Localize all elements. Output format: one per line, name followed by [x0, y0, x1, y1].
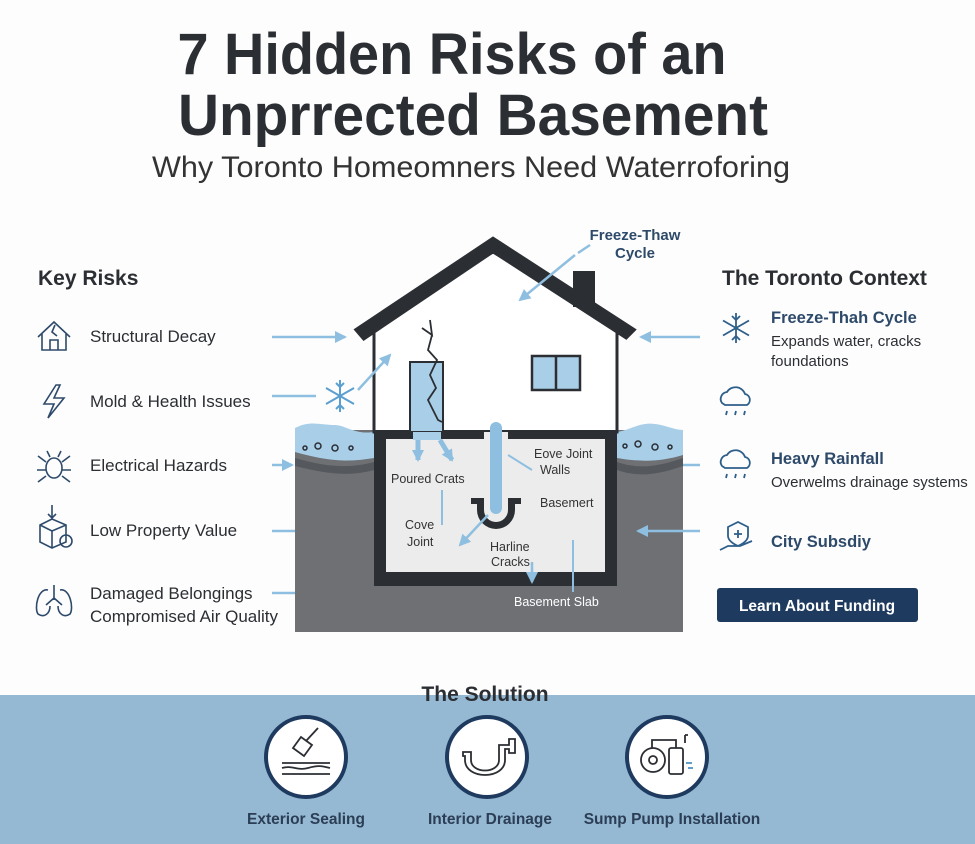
panel: key risks: [36, 267, 367, 626]
heading: key risks: Key Risks: [38, 267, 138, 290]
label: freeze-thaw: Cycle: [615, 245, 655, 262]
subtitle: Why Toronto Homeomners Need Waterroforing: [152, 151, 790, 184]
solution: sump pump: [584, 717, 760, 828]
context text: Expands water, cracks: [771, 333, 921, 350]
window: [532, 356, 580, 390]
risk list: Mold & Health Issues: [90, 392, 251, 411]
house diagram: [295, 227, 683, 632]
solution: exterior sealing: Exterior Sealing: [247, 811, 365, 828]
heading: The Toronto Context: [722, 267, 927, 290]
drain pipe: [471, 422, 521, 529]
button: learn about funding: Learn About Funding: [739, 598, 895, 615]
snowflake: [326, 380, 354, 412]
water pockets: [295, 423, 374, 460]
risk list: Structural Decay: [90, 327, 216, 346]
context text: foundations: [771, 353, 849, 370]
panel: the solution: [0, 683, 975, 844]
solution: exterior sealing: [247, 717, 365, 828]
diagram labels: Basement Slab: [514, 595, 599, 609]
button: learn about funding: [717, 588, 918, 622]
title: [178, 22, 768, 148]
water column with crack: [410, 320, 452, 460]
arrows right: [638, 337, 700, 531]
diagram labels: [391, 447, 599, 609]
heading: The Solution: [421, 683, 549, 706]
context text: City Subsdiy: [771, 533, 872, 551]
label: freeze-thaw: [590, 227, 681, 262]
roof: [358, 240, 632, 337]
solution: interior drainage: [428, 717, 552, 828]
context text: Overwelms drainage systems: [771, 474, 968, 491]
solution: interior drainage: Interior Drainage: [428, 811, 552, 828]
chimney: [573, 271, 595, 307]
diagram labels: Walls: [540, 463, 570, 477]
house body: [374, 252, 617, 432]
diagram labels: Harline: [490, 540, 530, 554]
risk list: Low Property Value: [90, 521, 237, 540]
risk list: [90, 327, 279, 626]
context text: [771, 309, 968, 551]
title: Unprrected Basement: [178, 83, 768, 148]
solution: sump pump: Sump Pump Installation: [584, 811, 760, 828]
diagram labels: Cove: [405, 518, 434, 532]
risk list: Damaged Belongings: [90, 584, 253, 603]
ground: [295, 430, 683, 632]
arrows left: [272, 337, 367, 593]
risk list: Electrical Hazards: [90, 456, 227, 475]
diagram labels: Poured Crats: [391, 472, 465, 486]
diagram labels: Eove Joint: [534, 447, 593, 461]
foundation: [374, 430, 617, 586]
context text: Heavy Rainfall: [771, 450, 884, 468]
context icons: [720, 313, 752, 550]
internal pointers: [442, 455, 573, 592]
diagram labels: Cracks: [491, 555, 530, 569]
label: freeze-thaw: Freeze-Thaw: [590, 227, 681, 244]
context text: Freeze-Thah Cycle: [771, 309, 917, 327]
diagram labels: Basemert: [540, 496, 594, 510]
diagram labels: Joint: [407, 535, 434, 549]
title: 7 Hidden Risks of an: [178, 22, 726, 87]
risk icons: [36, 322, 72, 616]
panel: toronto context: [638, 267, 968, 622]
risk list: Compromised Air Quality: [90, 607, 279, 626]
